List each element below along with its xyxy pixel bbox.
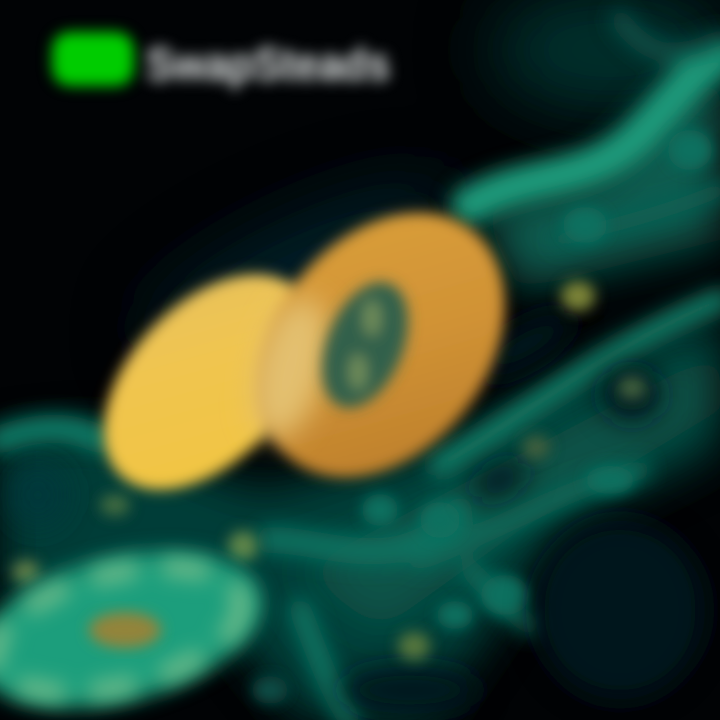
dark network cells bbox=[8, 300, 705, 714]
disc gold center bbox=[89, 612, 161, 648]
coin dollar symbol bbox=[305, 270, 425, 420]
logo wordmark: SwapSteads bbox=[146, 38, 390, 90]
logo bbox=[52, 32, 390, 90]
logo mark bbox=[52, 32, 134, 86]
lower left disc bbox=[0, 525, 277, 720]
right gold coin bbox=[209, 165, 555, 525]
coin edge highlight bbox=[239, 290, 341, 446]
network gold nodes bbox=[12, 281, 646, 660]
left gold coin bbox=[64, 235, 352, 529]
mottled teal cells bbox=[252, 130, 712, 704]
upper right dark teal glow bbox=[127, 0, 720, 383]
disc rim bbox=[0, 545, 254, 715]
